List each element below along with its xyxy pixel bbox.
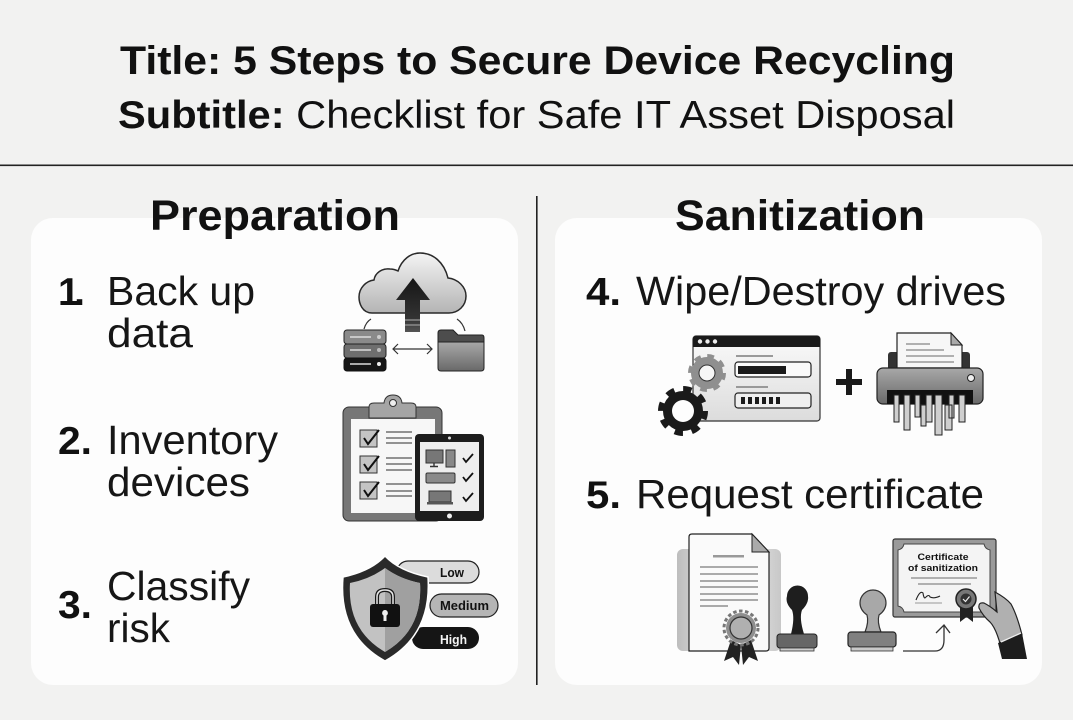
icon: certificate of sanitization: of sanitization [908, 563, 978, 574]
heading: sanitization: Sanitization [675, 192, 925, 240]
step 2 text [58, 417, 278, 505]
title: Title: 5 Steps to Secure Device Recycling [120, 39, 955, 83]
step 5 text: Request certificate [636, 471, 984, 517]
icon: plus [836, 369, 862, 395]
step 2 text: Inventory [107, 417, 278, 463]
icon: document with seal [677, 534, 781, 665]
icon: grey stamp [848, 590, 896, 651]
step 1 text: 1. [58, 271, 85, 314]
heading: preparation: Preparation [150, 192, 400, 240]
panel: preparation [31, 192, 518, 685]
step 3 text: Classify [107, 563, 250, 609]
icon: cloud backup [344, 253, 484, 371]
icon: shield and risk levels [343, 556, 498, 661]
step 1 text: data [107, 310, 193, 356]
step 3 text: 3. [58, 584, 92, 627]
icon: wipe software window [662, 336, 820, 432]
subtitle: Subtitle: Checklist for Safe IT Asset Disposal [118, 94, 955, 137]
icon: dark stamp [777, 586, 817, 651]
step 3 text [58, 563, 250, 651]
icon: shield and risk levels: High [440, 632, 467, 647]
step 4 text: Wipe/Destroy drives [636, 268, 1006, 314]
step 2 text: 2. [58, 420, 92, 463]
panel: sanitization [555, 192, 1042, 685]
icon: hand holding certificate [979, 592, 1027, 659]
step 5 text: 5. [586, 474, 621, 517]
icon: paper shredder [877, 333, 983, 435]
icon: shield and risk levels: Low [440, 565, 465, 580]
step 1 text: Back up [107, 268, 255, 314]
step 1 text [58, 268, 255, 356]
step 2 text: devices [107, 459, 250, 505]
icon: certificate of sanitization: Certificate [918, 552, 968, 563]
title block [118, 39, 955, 137]
step 4 text: 4. [586, 271, 621, 314]
icon: certificate of sanitization [893, 539, 996, 622]
step 3 text: risk [107, 605, 170, 651]
icon: clipboard and tablet [343, 395, 484, 521]
icon: shield and risk levels: Medium [440, 598, 489, 613]
arrow: stamp to certificate [903, 625, 950, 651]
